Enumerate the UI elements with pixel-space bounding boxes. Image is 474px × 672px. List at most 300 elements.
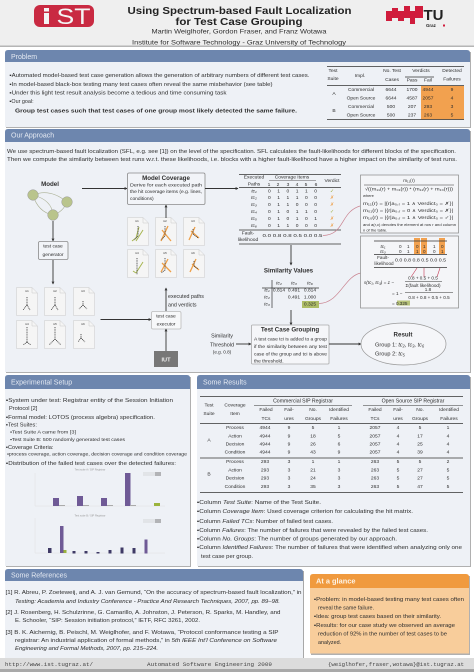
label: similarity threshold: Threshold (210, 342, 234, 348)
table: test suite overview: 4944 (423, 87, 434, 93)
executed path documents: tc6 (191, 251, 195, 255)
text: column descriptions: ▪Column Coverage Item : Used coverage criterion for calculating the hit matrix. (197, 509, 413, 515)
text: references: registrar: An industrial application of formal methods,” in 5th IEEE Int'l Conference on Software (15, 638, 277, 644)
box: test case generator: test case (43, 244, 63, 250)
table: coverage matrix: Fault- (242, 230, 255, 236)
heading: Our Approach: Our Approach (11, 132, 54, 140)
box: similarity calculation: tc₃ (380, 249, 386, 254)
table: results: 293 (261, 468, 269, 474)
text: column descriptions (197, 500, 462, 560)
box: similarity calculation: 1 (407, 244, 410, 249)
table: results: 27 (417, 468, 423, 474)
table: test suite overview: Fail (424, 78, 432, 84)
logo: iST (34, 4, 94, 29)
table: coverage matrix: tc₄ (251, 209, 257, 215)
box: similarity calculation: 0 (416, 244, 419, 249)
authors: Martin Weiglhofer, Gordon Fraser, and Franz Wotawa (152, 28, 327, 36)
table: results: Failures (440, 416, 458, 422)
box: similarity calculation: s(tc₁, tc₃) = 1 − (364, 280, 394, 285)
table: results: No. (309, 407, 317, 413)
table: coverage matrix: tc₁ (251, 188, 257, 194)
table: results: Suite (203, 411, 215, 417)
table: test suite overview (327, 66, 464, 120)
table: results: Condition (225, 450, 246, 456)
arrow: table to similarity values (290, 245, 292, 265)
table: results: 263 (371, 476, 379, 482)
box: similarity calculation: 0 (399, 244, 402, 249)
arrow: generator to test cases (52, 260, 54, 284)
table: results: 43 (310, 450, 316, 456)
table: results: 21 (310, 468, 316, 474)
panel: At a glance (310, 574, 470, 655)
table: test suite overview: A (332, 91, 336, 97)
table: results: Failures (330, 416, 348, 422)
box: similarity calculation: 0.0 0.8 0.8 0.5 0.0 0.5 (395, 258, 447, 262)
table: coverage matrix: 0 1 1 0 0 0 (268, 202, 317, 208)
table: results: Item (230, 411, 240, 417)
text: setup bullets: Protocol [2] (9, 406, 38, 412)
box: Model Coverage: Derive for each executed path (130, 182, 202, 188)
table: results: 4 (397, 425, 400, 431)
box: similarity calculation: 1 (433, 244, 436, 249)
label: executed paths and verdicts: executed paths (168, 294, 204, 300)
executed path documents: tc1 (135, 219, 139, 223)
affiliation: Institute for Software Technology - Graz University of Technology (132, 39, 347, 46)
table: results: 35 (310, 484, 316, 490)
table: results: 5 (419, 425, 422, 431)
test case documents (16, 288, 94, 348)
table: coverage matrix: tc₃ (251, 202, 257, 208)
executed path documents: tc5 (163, 251, 167, 255)
table: test suite overview: Cases (385, 77, 399, 83)
table: coverage matrix: ✗ (330, 202, 334, 208)
table: results: 2057 (370, 442, 381, 448)
table: test suite overview: Pass (407, 78, 418, 84)
table: results: Decision (226, 442, 245, 448)
table: results: ures (284, 416, 294, 422)
table: coverage matrix: 2 (277, 182, 280, 188)
text: column descriptions: ▪Column Identified Failures : The number of failures that were identified when analyzing only one (197, 545, 462, 551)
text: references (6, 590, 302, 652)
table: test suite overview: 263 (424, 112, 432, 118)
box: Model Coverage: Model Coverage (142, 175, 190, 182)
text: setup bullets: ▪Test Suite A came from [3] (10, 430, 76, 434)
table: results: Failed (259, 407, 273, 413)
label: executed paths and verdicts: and verdicts (168, 302, 197, 308)
table: results: 1 (447, 425, 450, 431)
box: IUT (154, 351, 178, 367)
table: results: Failed (368, 407, 382, 413)
table: results: 9 (288, 450, 291, 456)
table: coverage matrix: Executed (244, 174, 264, 180)
panel: Some References (5, 569, 304, 659)
table: results: 3 (338, 476, 341, 482)
logo: TU Graz: Graz (426, 23, 437, 28)
table: results: 9 (288, 442, 291, 448)
text: setup bullets: ▪Formal model: LOTOS (process algebra) specification. (6, 415, 155, 421)
table: test suite overview: 293 (424, 104, 432, 110)
box: Test Case Grouping (252, 325, 329, 364)
table: test suite overview: 5 (451, 112, 454, 118)
table: results: Action (228, 468, 242, 474)
table: results: 5 (397, 468, 400, 474)
table: results: Groups (412, 416, 429, 422)
box: similarity calculation: 1.8 (425, 287, 432, 292)
box: similarity calculation: 1 (416, 249, 419, 254)
matrix: similarity values: tc₃ (264, 302, 270, 308)
box: similarity calculation: 0 (423, 249, 426, 254)
table: test suite overview: Impl. (355, 73, 365, 79)
matrix: similarity values: 0.325 (304, 302, 316, 308)
text: references: E. Schooler, “SIP: Session initiation protocol,” IETF, RFC 3261, 2002. (15, 618, 200, 624)
table: coverage matrix: likelihood (238, 237, 258, 243)
footer: conference: Automated Software Engineering 2009 (147, 661, 272, 668)
table: results: 5 (447, 476, 450, 482)
table: results: 263 (371, 484, 379, 490)
box: Test Case Grouping: the threshold. (254, 358, 284, 364)
table: results: 2057 (370, 425, 381, 431)
diagram: model: Model (41, 181, 59, 188)
table: test suite overview: 1700 (407, 87, 418, 93)
matrix: similarity values: tc₂ (264, 294, 270, 300)
bar chart: suite B failures: Test suite B / SIP Registrar (75, 514, 106, 518)
heading: Some Results: Some Results (203, 380, 247, 386)
diagram: model (28, 181, 72, 220)
table: results: 9 (338, 450, 341, 456)
table: results: 9 (288, 425, 291, 431)
text: glance bullets: ▪Idea: group test cases based on their similarity. (314, 614, 441, 620)
box: test case executor (152, 312, 181, 329)
table: test suite overview: Suite (327, 76, 339, 82)
logo: TU Graz: TU (424, 7, 444, 24)
test case documents: tc5 (53, 322, 57, 326)
box: test case executor: executor (157, 322, 176, 328)
arrow: test cases to executor (100, 318, 151, 320)
table: results: 3 (288, 476, 291, 482)
table: results: 5 (397, 459, 400, 465)
table: results: 5 (447, 468, 450, 474)
table: results: 4 (447, 450, 450, 456)
table: coverage matrix: 0 1 0 1 0 1 (268, 216, 317, 222)
table: results: Decision (226, 476, 245, 482)
box: Jaccard formula: m₁₀(r) = |{r|a₀,ᵣ = 1 ∧ Verdict₀ = ✓}| (363, 215, 453, 220)
box: similarity calculation: 0 (441, 244, 444, 249)
table: coverage matrix: 0.0 0.8 0.8 0.5 0.0 0.5 (262, 233, 323, 239)
box: Test Case Grouping: A test case tci is added to a group (254, 336, 327, 342)
text: glance bullets: ▪Problem: in model-based testing many test cases often (314, 597, 464, 603)
table: results: 4944 (260, 425, 271, 431)
title: Using Spectrum-based Fault Localization (128, 6, 352, 17)
box: Jaccard formula: √((m₁₁(r) + m₀₁(r)) * (m₁₁(r) + m₁₀(r))) (365, 186, 454, 192)
title: for Test Case Grouping (176, 17, 302, 28)
heading: Some References (5, 569, 303, 581)
ellipse: Result (361, 323, 446, 365)
matrix: similarity values: tc₂ (276, 280, 282, 286)
table: results: 2057 (370, 434, 381, 440)
table: test suite overview: 6644 (386, 96, 397, 102)
table: results: Condition (225, 484, 246, 490)
table: test suite overview: Test (329, 68, 338, 74)
box: similarity calculation: 1 (407, 249, 410, 254)
matrix: similarity values: tc₁ (264, 288, 270, 294)
label: executed paths and verdicts (168, 294, 204, 308)
box: similarity calculation: 0.8 + 0.8 + 0.5 + 0.5 (408, 295, 450, 300)
table: results: Commercial SIP Registrar (273, 398, 333, 404)
table: results: 5 (397, 476, 400, 482)
box: test case executor: test case (156, 314, 176, 320)
table: results: A (207, 438, 211, 444)
arrow: IUT to executor (165, 329, 167, 351)
connector: similarity to calculation (319, 273, 361, 304)
table: coverage matrix: 6 (315, 182, 318, 188)
title (128, 6, 352, 28)
table: results: 293 (261, 484, 269, 490)
ellipse: Result: Result (394, 332, 412, 338)
heading: Problem (5, 50, 470, 62)
connector: likelihood to formula (323, 206, 360, 236)
table: results: 9 (288, 434, 291, 440)
table: coverage matrix: tc₅ (251, 216, 257, 222)
box: similarity calculation: = 1 − (392, 291, 403, 296)
table: coverage matrix: 0 1 1 1 0 0 (268, 195, 317, 201)
table: results: 3 (338, 468, 341, 474)
table: results: 263 (371, 468, 379, 474)
table: results: No. (416, 407, 424, 413)
executed path documents: tc3 (191, 219, 195, 223)
matrix: similarity values: tc₃ (291, 280, 297, 286)
footer: url: http://www.ist.tugraz.at/ (5, 661, 94, 668)
table: results: 4 (397, 442, 400, 448)
table: coverage matrix: tc₆ (251, 223, 257, 229)
table: coverage matrix (238, 174, 341, 244)
panel: Some Results (197, 375, 471, 567)
text: approach intro (7, 149, 457, 163)
box: Test Case Grouping: Test Case Grouping (261, 326, 319, 334)
text: setup bullets: ▪Test Suite B: 500 randomly generated test cases (10, 437, 126, 442)
box: similarity calculation: 0.8 + 0.5 + 0.5 (408, 276, 438, 280)
matrix: similarity values (262, 280, 319, 308)
arrow: threshold to grouping (236, 343, 251, 345)
label: similarity threshold: Similarity (211, 334, 233, 340)
text: glance bullets: ▪Results: for our case study we observed an average (314, 623, 455, 629)
ellipse: Result: Group 2: tc₅ (375, 352, 406, 358)
table: test suite overview: No. Test (383, 68, 402, 74)
table: coverage matrix: ✗ (330, 195, 334, 201)
label: similarity threshold (210, 334, 234, 354)
table: results: 2057 (370, 450, 381, 456)
table: results: 1 (338, 459, 341, 465)
table: results: Identified (329, 407, 349, 413)
footer: emails: {weiglhofer,fraser,wotawa}@ist.tugraz.at (328, 661, 464, 668)
table: coverage matrix: ✗ (330, 216, 334, 222)
table: test suite overview: Open Source (347, 96, 376, 102)
text: references: [1] R. Abreu, P. Zoeteweij, and A. J. van Gemund, “On the accuracy of spectrum-based fault localization,” in (6, 590, 302, 596)
text: glance bullets (314, 597, 464, 646)
box: Jaccard formula: m₁₁(r) (403, 178, 415, 183)
text: problem bullets: Group test cases such that test cases of one group most likely detected the same failure. (15, 108, 297, 114)
table: test suite overview: 9 (451, 87, 454, 93)
matrix: similarity values: 0.814 (273, 288, 285, 294)
text: glance bullets: analyzed. (318, 640, 341, 646)
box: similarity calculation: 0 (433, 249, 436, 254)
table: results: 5 (447, 484, 450, 490)
table: coverage matrix: ✓ (330, 188, 334, 194)
table: results: 293 (261, 476, 269, 482)
arrow: executor to executed paths (165, 288, 167, 311)
text: problem bullets: ▪Our goal: (10, 99, 34, 105)
test case documents: tc6 (81, 322, 85, 326)
table: results: 5 (397, 484, 400, 490)
table: results (200, 396, 463, 492)
table: test suite overview: Commercial (348, 87, 374, 93)
table: results: 4944 (260, 434, 271, 440)
table: results: 3 (288, 459, 291, 465)
table: coverage matrix: 5 (305, 182, 308, 188)
bar chart: suite A failures: Test suite A / SIP Registrar (75, 468, 105, 472)
table: results: 4944 (260, 450, 271, 456)
table: results: Process (226, 425, 244, 431)
header band (0, 0, 474, 47)
box: similarity calculation: likelihood (374, 261, 394, 266)
table: test suite overview: 237 (408, 112, 416, 118)
table: results: 18 (310, 434, 316, 440)
table: results: Fail- (393, 407, 403, 413)
table: results: ures (393, 416, 403, 422)
test case documents: tc2 (53, 289, 57, 293)
box: similarity calculation: 1 (441, 249, 444, 254)
box: Jaccard formula: where (363, 193, 375, 198)
box: similarity calculation: 1 (423, 244, 426, 249)
box: Model Coverage: the hit coverage items (e.g. lines, (130, 189, 202, 195)
text: glance bullets: reveal the same failure. (318, 606, 374, 612)
text: references: [3] B. K. Aichernig, B. Peischl, M. Weiglhofer, and F. Wotawa, “Protocol conformance testing a SIP (6, 630, 279, 636)
arrow: executed paths to coverage (165, 205, 167, 218)
table: results: 263 (371, 459, 379, 465)
table: test suite overview: Open Source (347, 112, 376, 118)
text: problem bullets (10, 73, 310, 114)
arrow: grouping to result (329, 343, 361, 345)
table: test suite overview: 3 (451, 104, 454, 110)
bar chart: suite B failures (35, 514, 165, 554)
text: column descriptions: ▪Column Test Suite : Name of the Test Suite. (197, 500, 321, 506)
bar chart: suite A failures (35, 468, 165, 506)
table: results: Open Source SIP Registrar (382, 398, 445, 404)
text: references: Engineering and Formal Methods, 2007, pp. 215–224. (15, 646, 158, 652)
table: results: 24 (310, 476, 316, 482)
arrow: similarity to grouping (290, 310, 292, 325)
table: test suite overview: 207 (408, 104, 416, 110)
box: Model Coverage (128, 173, 205, 204)
footer band (0, 658, 474, 672)
label: similarity threshold: (e.g. 0.8) (213, 350, 232, 354)
table: coverage matrix: 0 1 0 1 1 0 (268, 188, 317, 194)
table: coverage matrix: 0 1 0 1 1 0 (268, 209, 317, 215)
table: results: 3 (338, 484, 341, 490)
table: results: 5 (338, 434, 341, 440)
text: references: Testing: Academia and Industry Conference - Practice And Research Techniques, 2007, pp. 89–98. (15, 599, 280, 605)
table: results: 5 (312, 425, 315, 431)
text: problem bullets: ▪Under this light test result analysis become a tedious and time consuming task (10, 90, 227, 96)
table: test suite overview: 6644 (386, 87, 397, 93)
table: results: 1 (338, 425, 341, 431)
text: setup bullets: ▪Coverage Criteria: (6, 445, 54, 451)
table: results: 4 (447, 434, 450, 440)
test case documents: tc4 (25, 322, 29, 326)
box: Jaccard formula: and a(r,c) denotes the element at row r and column (363, 222, 456, 227)
heading: Similarity Values: Similarity Values (264, 268, 314, 274)
panel: Our Approach (5, 129, 471, 373)
table: results: 17 (417, 434, 423, 440)
table: results: 26 (310, 442, 316, 448)
table: results: 39 (417, 450, 423, 456)
matrix: similarity values: 0.814 (304, 288, 316, 294)
table: coverage matrix: 4 (296, 182, 299, 188)
table: results: B (207, 472, 211, 478)
box: similarity calculation: Fault- (377, 255, 389, 260)
arrow: model to generator (52, 221, 54, 241)
box: Model Coverage: conditions) (130, 196, 154, 202)
box: test case generator (38, 242, 68, 260)
table: results: Coverage (224, 402, 246, 408)
table: coverage matrix: tc₂ (251, 195, 257, 201)
box: similarity calculation: 0 (399, 249, 402, 254)
table: coverage matrix: 3 (287, 182, 290, 188)
heading: At a glance (310, 574, 469, 588)
heading: Experimental Setup (5, 375, 190, 389)
table: results: 293 (261, 459, 269, 465)
panel: Problem (5, 50, 471, 128)
table: test suite overview: Verdicts (412, 68, 430, 74)
table: test suite overview: Commercial (348, 104, 374, 110)
table: results: 3 (288, 484, 291, 490)
box: Test Case Grouping: case of the group and tci is above (254, 352, 327, 358)
table: test suite overview: 2057 (423, 96, 434, 102)
executed path documents (128, 218, 204, 278)
text: setup bullets: ▪Test Suites: (6, 422, 37, 428)
table: results: 4 (397, 434, 400, 440)
matrix: similarity values: 1.000 (304, 294, 316, 300)
text: problem bullets: ▪In model-based black-box testing many test cases often reveal the same misbehavior (see table) (10, 82, 273, 88)
table: results: 27 (417, 476, 423, 482)
box: test case generator: generator (43, 252, 64, 258)
text: approach intro: We use spectrum-based fault localization (SFL, e.g. see [1]) on the level of the specification. SFL calculates the fault-likelihoods for different blocks of the specification. (7, 149, 456, 155)
text: setup bullets: ▪Distribution of the failed test cases over the detected failures: (6, 461, 176, 467)
table: test suite overview: Detected (442, 68, 462, 74)
table: results: Process (226, 459, 244, 465)
table: coverage matrix: 1 (268, 182, 271, 188)
box: similarity calculation: tc₁ (380, 244, 386, 249)
matrix: similarity values: tc₆ (307, 280, 313, 286)
box: Jaccard formula (360, 175, 458, 233)
heading: Some Results (197, 375, 470, 389)
table: coverage matrix: ✗ (330, 223, 334, 229)
panel: Experimental Setup (5, 375, 191, 567)
executed path documents: tc2 (163, 219, 167, 223)
heading: Some References: Some References (11, 572, 68, 580)
test case documents: tc1 (25, 289, 29, 293)
table: coverage matrix: Paths (248, 182, 261, 188)
text: glance bullets: reduction of 92% in the number of test cases to be (318, 632, 447, 638)
table: results: 3 (288, 468, 291, 474)
table: test suite overview: B (332, 108, 336, 114)
table: results: 5 (419, 459, 422, 465)
table: coverage matrix: Verdict (325, 178, 340, 184)
box: similarity calculation: Σ(fault likelihood) (405, 283, 441, 288)
text: column descriptions: ▪Column No. Groups : The number of groups generated by our approach. (197, 536, 397, 542)
text: references: [2] J. Rosenberg, H. Schulzrinne, G. Camarillo, A. Johnston, J. Peterson, R. Sparks, M. Handley, and (6, 610, 280, 616)
table: test suite overview: 500 (387, 104, 395, 110)
table: results: 4 (447, 442, 450, 448)
